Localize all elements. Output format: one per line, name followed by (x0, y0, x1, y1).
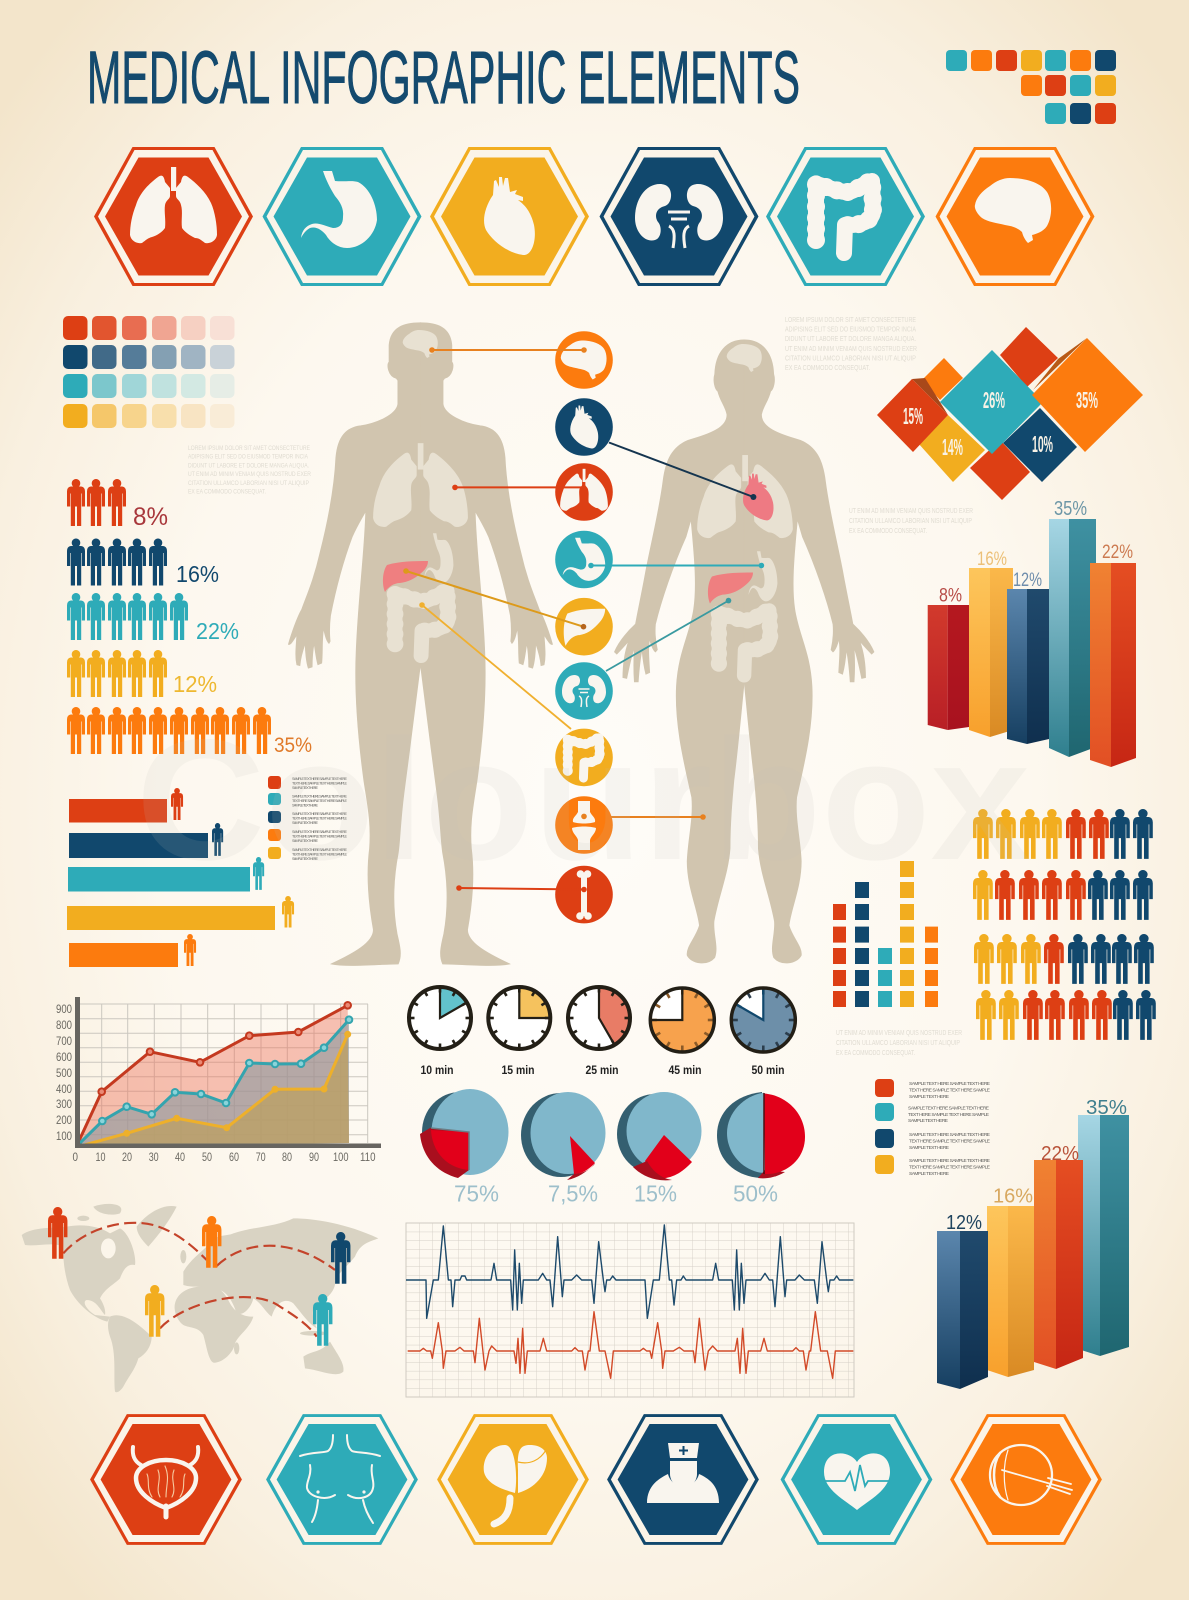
lower chart legend: SAMPLE TEXT HERE SAMPLE TEXT HERE (908, 1106, 989, 1112)
hexagon: intestine (766, 147, 925, 286)
hexagon: brain (936, 147, 1094, 286)
people row: 16% (67, 538, 219, 587)
line chart (56, 997, 381, 1164)
block column chart (833, 861, 938, 1007)
bottom hexagon: eye (950, 1414, 1102, 1545)
bar chart legend: SAMPLE TEXT HERE (292, 839, 319, 843)
lower chart legend: TEXT HERE SAMPLE TEXT HERE SAMPLE (909, 1138, 990, 1144)
text block: lorem lower right: EX EA COMMODO CONSEQUAT. (836, 1050, 915, 1057)
clock: 50 min: 50 min (752, 1065, 784, 1077)
bar chart legend: TEXT HERE SAMPLE TEXT HERE SAMPLE (292, 816, 348, 820)
male body silhouette (288, 323, 552, 965)
line chart: 70 (256, 1150, 266, 1164)
bottom hexagon: heart with pulse (781, 1414, 932, 1545)
lower chart legend (875, 1079, 990, 1177)
line chart: 110 (360, 1150, 376, 1164)
lower chart legend: SAMPLE TEXT HERE (909, 1171, 949, 1177)
clock: 15 min (488, 987, 550, 1077)
text block: lorem left: UT ENIM AD MINIM VENIAM QUIS NOSTRUD EXER (188, 471, 311, 478)
line chart: 60 (229, 1150, 239, 1164)
connector: kidney (606, 598, 731, 671)
clock: 15 min: 15 min (502, 1065, 534, 1077)
pie: 7,5% (521, 1092, 606, 1207)
diamond percentage chart: 35% (1076, 387, 1098, 413)
pie: 15%: 15% (634, 1181, 677, 1207)
3D bar chart upper: 16% (977, 549, 1007, 570)
text block: lorem top right (785, 317, 917, 372)
icon circle: heart (555, 398, 613, 456)
3D bar chart upper: 22% (1102, 542, 1133, 563)
hexagon: kidneys (600, 147, 758, 286)
text block: lorem top right: ADIPISING ELIT SED DO EIUSMOD TEMPOR INCIA (785, 327, 916, 334)
hexagon: lungs (94, 147, 253, 286)
text block: lorem top right: EX EA COMMODO CONSEQUAT. (785, 365, 870, 372)
diamond percentage chart: 26% (983, 387, 1005, 413)
people row: 8%: 8% (133, 503, 168, 531)
text block: lorem left: LOREM IPSUM DOLOR SIT AMET CONSECTETURE (188, 445, 310, 452)
colour swatch grid (63, 316, 234, 428)
line chart: 40 (175, 1150, 185, 1164)
diamond percentage chart: 15% (903, 403, 923, 429)
bar chart legend: TEXT HERE SAMPLE TEXT HERE SAMPLE (292, 782, 348, 786)
hexagon: stomach (262, 147, 422, 286)
people row: 22% (67, 593, 239, 644)
icon circle: lungs (555, 463, 613, 521)
female body silhouette (614, 340, 874, 963)
line chart: 0 (72, 1150, 78, 1164)
connector: bone (456, 885, 587, 892)
text block: lorem right (849, 508, 973, 535)
bar chart legend: TEXT HERE SAMPLE TEXT HERE SAMPLE (292, 799, 348, 803)
line chart: 30 (149, 1150, 159, 1164)
text block: lorem top right: DIDUNT UT LABORE ET DOLORE MANGA ALIQUA. (785, 336, 916, 343)
diamond percentage chart: 14% (942, 434, 963, 460)
people row: 12% (67, 650, 217, 697)
lower chart legend: SAMPLE TEXT HERE SAMPLE TEXT HERE (909, 1081, 990, 1087)
bottom hexagon: female torso (266, 1414, 418, 1545)
3D bar chart lower: 12% (946, 1212, 982, 1234)
lower chart legend: TEXT HERE SAMPLE TEXT HERE SAMPLE (909, 1164, 990, 1170)
people row: 35% (67, 707, 312, 757)
bar chart legend: SAMPLE TEXT HERE SAMPLE TEXT HERE (292, 812, 348, 816)
map people (48, 1207, 350, 1346)
bar chart legend (268, 776, 348, 861)
line chart: 80 (282, 1150, 292, 1164)
bottom hexagon: nurse (607, 1414, 759, 1545)
pie: 50% (717, 1092, 805, 1207)
bar chart legend: TEXT HERE SAMPLE TEXT HERE SAMPLE (292, 852, 348, 856)
line chart: 700 (56, 1034, 72, 1048)
text block: lorem lower right: UT ENIM AD MINIM VENIAM QUIS NOSTRUD EXER (836, 1030, 962, 1037)
line chart: 10 (96, 1150, 106, 1164)
text block: lorem left: CITATION ULLAMCO LABORIAN NISI UT ALIQUIP (188, 480, 309, 487)
people row: 22%: 22% (196, 618, 239, 644)
line chart: 800 (56, 1018, 72, 1032)
line chart: 200 (56, 1113, 72, 1127)
bottom hexagon: bladder (90, 1414, 242, 1545)
3D bar chart upper: 8% (939, 586, 962, 607)
icon circle: bone (555, 866, 613, 923)
text block: lorem left: DIDUNT UT LABORE ET DOLORE MANGA ALIQUA. (188, 462, 309, 469)
map dashed arcs (63, 1223, 335, 1337)
text block: lorem top right: CITATION ULLAMCO LABORIAN NISI UT ALIQUIP (785, 355, 916, 362)
lower chart legend: SAMPLE TEXT HERE SAMPLE TEXT HERE (909, 1158, 990, 1164)
3D bar chart upper: 35% (1054, 498, 1087, 520)
3D bar chart upper: 12% (1013, 570, 1042, 591)
pie: 75%: 75% (454, 1181, 499, 1207)
text block: lorem right: UT ENIM AD MINIM VENIAM QUIS NOSTRUD EXER (849, 508, 973, 515)
bar chart legend: SAMPLE TEXT HERE SAMPLE TEXT HERE (292, 794, 348, 798)
lower chart legend: SAMPLE TEXT HERE (909, 1094, 949, 1100)
clock: 45 min: 45 min (668, 1065, 702, 1077)
pie: 75% (420, 1089, 508, 1207)
bar chart legend: TEXT HERE SAMPLE TEXT HERE SAMPLE (292, 834, 348, 838)
line chart: 900 (56, 1002, 72, 1016)
people row: 12%: 12% (173, 671, 217, 697)
lower chart legend: TEXT HERE SAMPLE TEXT HERE SAMPLE (909, 1088, 990, 1094)
horizontal bar chart with people (67, 788, 294, 967)
connector: joint (581, 814, 706, 820)
clock: 25 min (568, 987, 630, 1077)
text block: lorem lower right (836, 1030, 962, 1057)
clock: 50 min (731, 988, 795, 1077)
icon circle: intestine (555, 729, 613, 786)
line chart: 500 (56, 1066, 72, 1080)
line chart: 300 (56, 1097, 72, 1111)
pie: 7,5%: 7,5% (548, 1181, 598, 1207)
text block: lorem right: CITATION ULLAMCO LABORIAN NISI UT ALIQUIP (849, 518, 972, 525)
3D bar chart lower: 22% (1041, 1143, 1079, 1165)
text block: lorem right: EX EA COMMODO CONSEQUAT. (849, 528, 927, 535)
people grid (973, 809, 1156, 1040)
lower chart legend: TEXT HERE SAMPLE TEXT HERE SAMPLE (908, 1112, 989, 1118)
3D bar chart upper (928, 498, 1136, 767)
text block: lorem left: ADIPISING ELIT SED DO EIUSMOD TEMPOR INCIA (188, 454, 308, 461)
text block: lorem left: EX EA COMMODO CONSEQUAT. (188, 488, 266, 496)
text block: lorem top right: LOREM IPSUM DOLOR SIT AMET CONSECTETURE (785, 317, 916, 324)
pie: 15% (617, 1092, 702, 1207)
3D bar chart lower: 35% (1086, 1097, 1127, 1119)
line chart: 50 (202, 1150, 212, 1164)
icon circle: stomach (555, 531, 613, 588)
bar chart legend: SAMPLE TEXT HERE (292, 786, 319, 790)
icon circle: kidneys (555, 662, 613, 720)
3D bar chart lower: 16% (993, 1186, 1033, 1208)
diamond percentage chart: 10% (1032, 431, 1053, 457)
diamond percentage chart (877, 327, 1143, 500)
connector: liver (403, 568, 586, 630)
clock: 10 min: 10 min (420, 1065, 454, 1077)
3D bar chart lower (937, 1097, 1129, 1389)
bottom hexagon: gland (437, 1414, 589, 1545)
lower chart legend: SAMPLE TEXT HERE SAMPLE TEXT HERE (909, 1132, 990, 1138)
bar chart legend: SAMPLE TEXT HERE SAMPLE TEXT HERE (292, 848, 348, 852)
line chart: 600 (56, 1050, 72, 1064)
icon circle: brain (555, 331, 613, 389)
ECG chart (406, 1223, 854, 1397)
text block: lorem left (188, 445, 311, 496)
male organs (373, 330, 468, 656)
clock: 10 min (409, 987, 471, 1077)
connector: brain (429, 347, 587, 353)
colour squares top right (946, 50, 1116, 124)
line chart: 100 (333, 1150, 349, 1164)
watermark: Colourbox (136, 704, 1030, 896)
bar chart legend: SAMPLE TEXT HERE (292, 857, 319, 861)
hexagon: heart (430, 147, 589, 286)
bar chart legend: SAMPLE TEXT HERE SAMPLE TEXT HERE (292, 830, 348, 834)
people row: 8% (67, 479, 168, 531)
lower chart legend: SAMPLE TEXT HERE (908, 1118, 948, 1124)
connector: stomach (588, 563, 764, 568)
world map (22, 1204, 378, 1392)
female organs (697, 344, 793, 675)
bar chart legend: SAMPLE TEXT HERE (292, 804, 319, 808)
text block: lorem lower right: CITATION ULLAMCO LABORIAN NISI UT ALIQUIP (836, 1040, 960, 1047)
clock: 25 min: 25 min (586, 1065, 618, 1077)
line chart: 90 (309, 1150, 319, 1164)
connector: heart (609, 442, 756, 500)
icon circle: liver (555, 598, 613, 656)
people row: 35%: 35% (274, 734, 312, 757)
bar chart legend: SAMPLE TEXT HERE SAMPLE TEXT HERE (292, 777, 348, 781)
line chart: 400 (56, 1082, 72, 1096)
lower chart legend: SAMPLE TEXT HERE (909, 1145, 949, 1151)
line chart: 100 (56, 1129, 72, 1143)
bar chart legend: SAMPLE TEXT HERE (292, 821, 319, 825)
people row: 16%: 16% (176, 561, 219, 587)
connector: lungs (452, 485, 584, 490)
line chart: 20 (122, 1150, 132, 1164)
icon circle: knee joint (555, 796, 613, 854)
connector: intestine (419, 602, 571, 729)
pie: 50%: 50% (733, 1181, 778, 1207)
text block: lorem top right: UT ENIM AD MINIM VENIAM QUIS NOSTRUD EXER (785, 346, 917, 353)
clock: 45 min (650, 988, 714, 1077)
